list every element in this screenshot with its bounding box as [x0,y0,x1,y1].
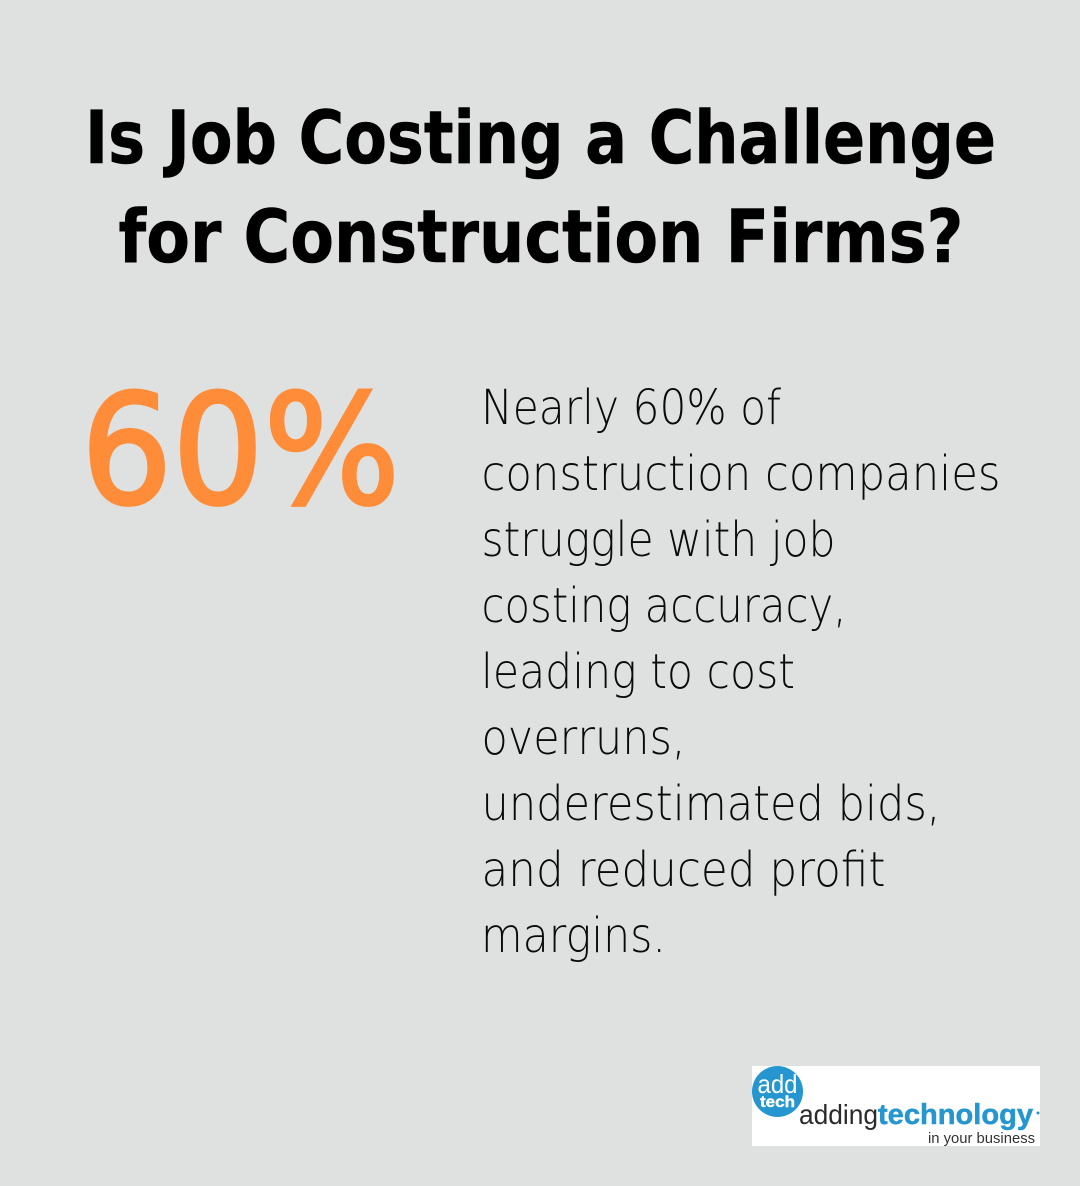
title [85,96,996,280]
logo icon: add tech circle: tech [760,1094,795,1111]
description text: margins. [481,908,666,964]
description text: struggle with job [482,512,836,568]
logo wordmark: technology [878,1099,1033,1131]
logo icon: add tech circle: add [758,1069,798,1099]
description text: overruns, [482,710,686,766]
description text: construction companies [482,446,1000,502]
description text: and reduced profit [482,842,886,898]
logo wordmark [799,1099,1040,1147]
description text: leading to cost [481,644,795,700]
logo: adding technology [752,1066,1040,1147]
description text [481,380,1000,964]
description text: Nearly 60% of [481,380,781,436]
logo icon: add tech circle [752,1066,803,1117]
title: for Construction Firms? [118,195,964,280]
description text: underestimated bids, [482,776,940,832]
description text: costing accuracy, [482,578,846,634]
logo wordmark: in your business [928,1131,1035,1147]
big stat: 60%: 60% [81,362,400,539]
logo wordmark: adding [799,1099,878,1130]
